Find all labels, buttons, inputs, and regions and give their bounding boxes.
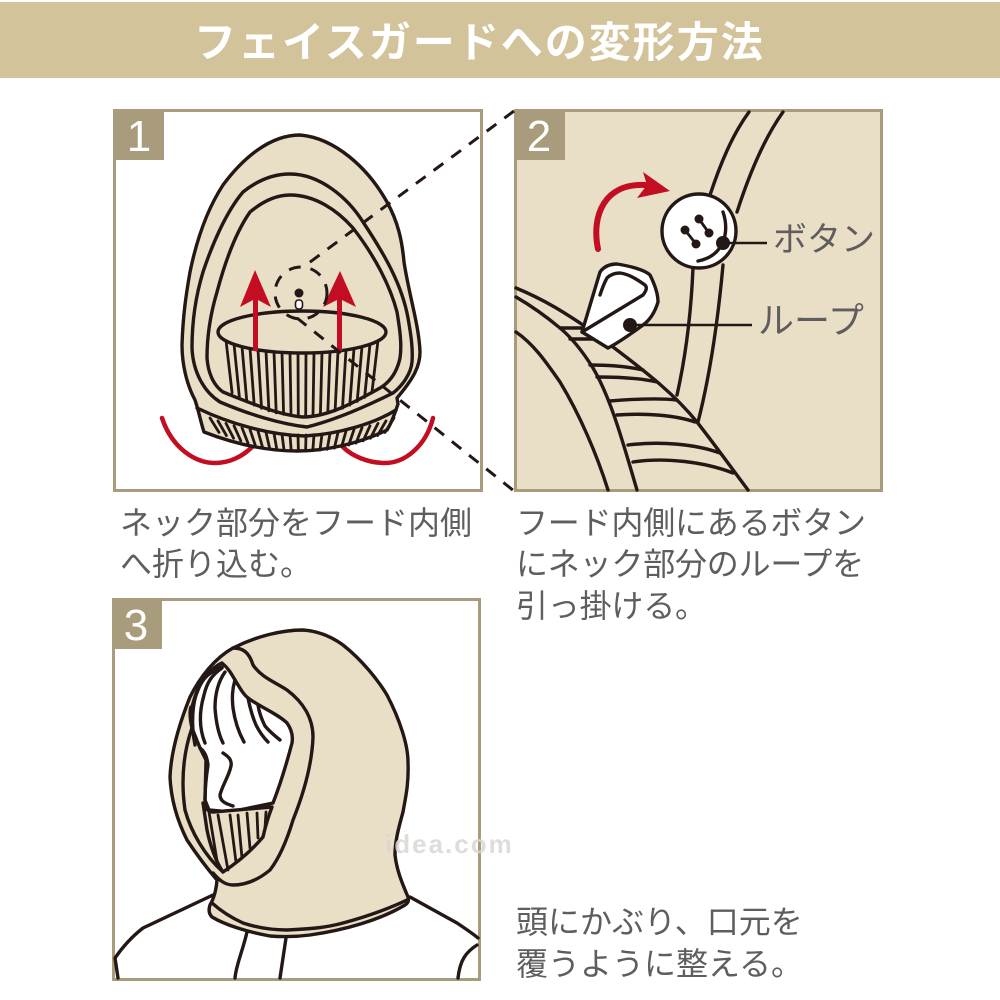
step 3 caption [516,904,803,982]
badge 2 [515,110,565,161]
neck opening [218,311,386,353]
button [662,194,736,268]
hood band lines [677,112,783,422]
title text: フェイスガードへの変形方法 [194,19,765,66]
face opening [190,663,292,812]
step 2 caption: 引っ掛ける。 [516,588,707,624]
step 2 caption [516,505,866,624]
collar seam [212,900,407,930]
badge 1 [114,110,164,161]
step 3 caption: 頭にかぶり、口元を [516,904,803,940]
watermark: idea.com [385,829,514,859]
red curved arrow [596,172,670,249]
hair [193,667,280,745]
red arrows pointing up [240,270,356,351]
button label: ボタン [773,221,875,259]
dashed zoom lines [297,111,514,491]
dashed zoom circle [275,267,327,319]
step 1 caption [120,505,472,582]
step 2 caption: フード内側にあるボタン [516,505,866,541]
step 1 caption: ネック部分をフード内側 [120,505,472,541]
badge 3: 3 [124,601,148,650]
red curved arrows at collar [162,418,433,463]
neck ribbing [226,340,378,416]
face outline [200,748,233,806]
button dot and loop [294,288,304,309]
panel 1: fold the neck into the hood [114,110,482,490]
badge 3 [113,599,162,650]
loop tab [582,264,658,348]
step 3 caption: 覆うように整える。 [516,946,803,982]
collar band seam [197,408,396,436]
collar ribbing [210,418,394,451]
loop label: ループ [758,300,864,341]
step 1 caption: へ折り込む。 [120,546,312,582]
hood [170,630,408,937]
badge 1: 1 [127,112,151,161]
chin ribbing [203,803,272,872]
panel 2: hook the loop on the button [516,110,882,490]
shoulders [115,895,478,978]
step 2 caption: にネック部分のループを [516,546,864,582]
panel 3: wearing the hood [114,600,480,980]
left inner lining [183,728,223,872]
hood illustration [182,135,420,451]
badge 2: 2 [527,112,551,161]
title banner [0,2,1000,78]
neck rib lines [516,288,748,490]
hood opening rim [213,648,313,885]
